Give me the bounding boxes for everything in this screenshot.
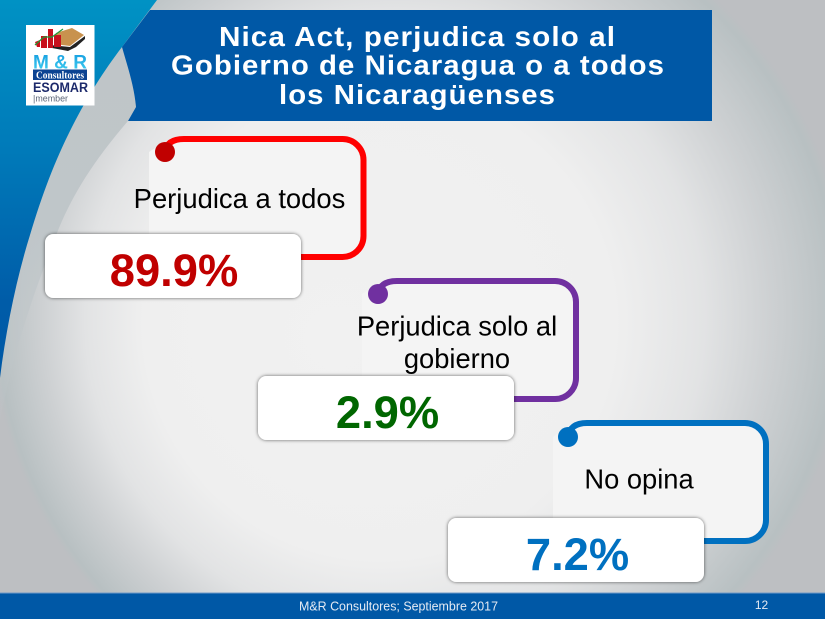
value: 89.9% [110,245,238,296]
label: Perjudica solo al [357,310,557,342]
value: 2.9% [336,387,439,438]
label: Perjudica a todos [134,183,345,214]
card: No opina [448,423,766,582]
red outline [165,139,364,257]
value box [448,518,704,582]
card panel blue [553,423,766,541]
blue curved corner shape [0,0,157,378]
logo M & R: M & R [33,52,87,74]
label [357,310,557,374]
value box [258,376,514,440]
title text: Nica Act, perjudica solo al [219,21,616,52]
blue outline [568,423,766,541]
value: 7.2% [526,529,629,580]
logo ESOMAR: ESOMAR [33,80,88,95]
card panel purple [362,281,576,399]
card panel red [149,139,364,257]
logo: M&R Consultores ESOMAR member [26,25,94,106]
blue dot [558,427,578,447]
grey curved band [0,47,136,420]
card: Perjudica a todos [45,139,364,298]
page number: 12 [755,598,768,612]
value box [45,234,301,298]
label: gobierno [404,343,510,374]
purple outline [378,281,576,399]
title banner [122,10,712,121]
logo Consultores: Consultores [36,70,84,82]
footer bar [0,592,825,619]
footer source text: M&R Consultores; Septiembre 2017 [299,600,498,614]
icon: briefcase with bar chart [35,28,85,51]
card: Perjudica solo al gobierno [258,281,576,440]
title text: los Nicaragüenses [279,79,556,110]
title text: Gobierno de Nicaragua o a todos [171,50,665,80]
red dot [155,142,175,162]
title text [171,21,665,110]
purple dot [368,284,388,304]
label: No opina [584,464,694,494]
logo member: |member [33,94,68,104]
